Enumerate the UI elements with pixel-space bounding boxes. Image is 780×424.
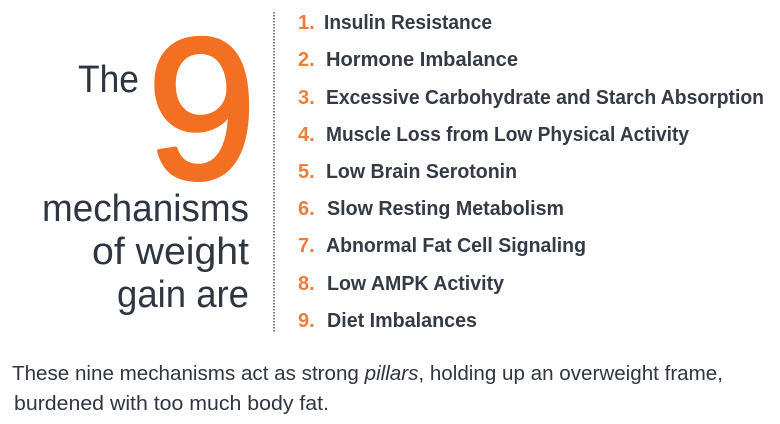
heading: The 9 mechanisms of weight gain are	[42, 0, 257, 316]
item 7: 7.	[298, 235, 315, 257]
heading line: of weight: of weight	[92, 231, 249, 273]
item 9: 9.	[298, 310, 315, 332]
closing line 2: burdened with too much body fat.	[14, 392, 329, 415]
numbered list of nine mechanisms	[298, 12, 764, 332]
item 6: 6.	[298, 198, 315, 220]
closing line 1: These nine mechanisms act as strong pillars, holding up an overweight frame,	[12, 362, 723, 385]
item 1: 1.	[298, 12, 315, 34]
item 4: 4.	[298, 124, 315, 146]
item 3: 3.	[298, 87, 315, 109]
item 2: Hormone Imbalance	[326, 49, 518, 71]
item 5: 5.	[298, 161, 315, 183]
item 2: 2.	[298, 49, 315, 71]
heading line: mechanisms: mechanisms	[42, 188, 249, 230]
item 5: Low Brain Serotonin	[326, 161, 517, 183]
item 4: Muscle Loss from Low Physical Activity	[326, 124, 690, 146]
item 9: Diet Imbalances	[327, 310, 477, 332]
heading word: The: The	[78, 59, 139, 101]
heading line: gain are: gain are	[117, 274, 249, 316]
dotted vertical divider	[273, 12, 275, 332]
closing text block	[12, 362, 723, 415]
item 1: Insulin Resistance	[324, 12, 492, 34]
item 8: 8.	[298, 273, 315, 295]
item 6: Slow Resting Metabolism	[327, 198, 564, 220]
item 8: Low AMPK Activity	[327, 273, 505, 295]
item 7: Abnormal Fat Cell Signaling	[326, 235, 586, 257]
item 3: Excessive Carbohydrate and Starch Absorption	[326, 87, 764, 109]
big orange numeral 9: 9	[147, 0, 257, 221]
